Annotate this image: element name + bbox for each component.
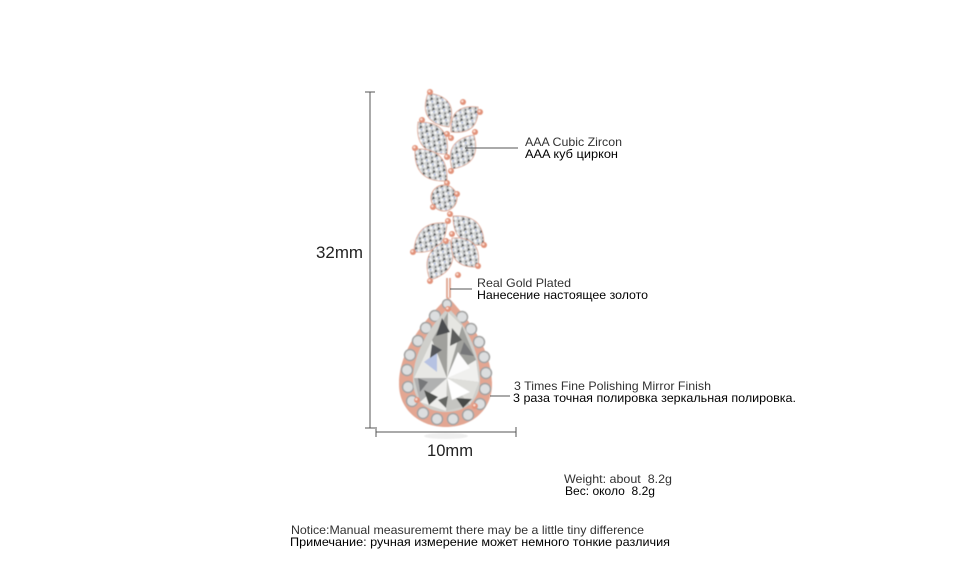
weight text (564, 472, 672, 498)
earring: connector stem (447, 278, 450, 298)
notice text: Notice:Manual measurememt there may be a little tiny difference (291, 523, 644, 537)
callout: cubic zircon (465, 135, 622, 161)
earring product illustration (399, 89, 492, 439)
notice text (290, 523, 670, 549)
weight text: Вес: около 8.2g (565, 484, 655, 498)
callout: cubic zircon: AAA куб циркон (525, 147, 618, 161)
earring: upper leaf cluster (412, 89, 483, 186)
earring: lower leaf cluster (410, 211, 487, 284)
width dimension: 10mm (427, 442, 473, 460)
callout: real gold plated: Нанесение настоящее золото (477, 288, 648, 302)
height dimension: 32mm (316, 244, 363, 262)
height dimension (316, 92, 375, 428)
callout: mirror finish (490, 379, 796, 405)
earring: faint reflection (424, 433, 468, 439)
callout: mirror finish: 3 Times Fine Polishing Mirror Finish (514, 379, 711, 393)
width dimension (376, 427, 516, 460)
callout: mirror finish: 3 раза точная полировка зеркальная полировка. (513, 391, 796, 405)
callout: real gold plated (450, 276, 648, 302)
callout: cubic zircon: AAA Cubic Zircon (525, 135, 622, 149)
earring: round stone (430, 185, 460, 211)
notice text: Примечание: ручная измерение может немного тонкие различия (290, 535, 670, 549)
weight text: Weight: about 8.2g (564, 472, 672, 486)
callout: real gold plated: Real Gold Plated (477, 276, 571, 290)
earring: pear drop pendant (399, 297, 492, 427)
